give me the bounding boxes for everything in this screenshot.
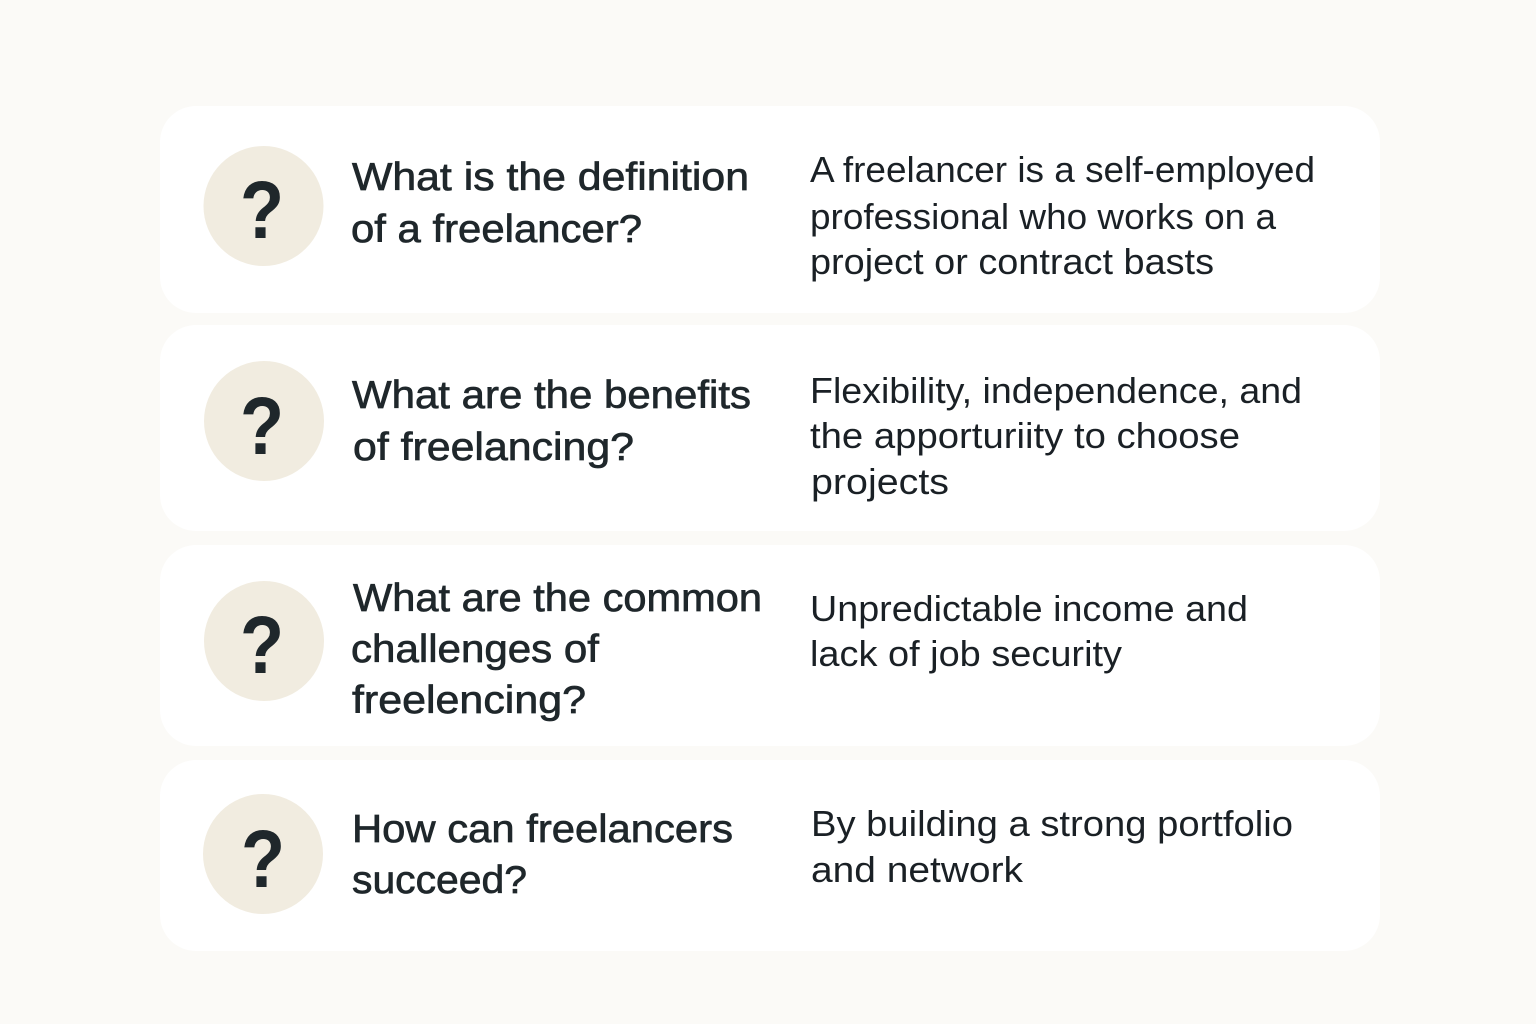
answer text: project or contract basts — [810, 241, 1214, 282]
question heading: What are the common — [353, 577, 762, 620]
question heading: succeed? — [352, 859, 527, 902]
panel: common challenges of freelancing — [160, 545, 1380, 746]
answer text: professional who works on a — [810, 196, 1277, 237]
answer text — [810, 149, 1315, 282]
answer text — [810, 370, 1302, 502]
icon: question mark badge — [203, 794, 323, 914]
answer text: and network — [811, 849, 1024, 890]
question heading — [351, 577, 762, 722]
answer text: A freelancer is a self-employed — [810, 149, 1315, 190]
panel: definition of a freelancer — [160, 106, 1380, 313]
question heading — [351, 156, 749, 251]
answer text: projects — [811, 461, 949, 502]
icon: question mark badge: ? — [241, 814, 285, 905]
answer text — [810, 588, 1248, 674]
answer text: lack of job security — [810, 633, 1122, 674]
answer text: By building a strong portfolio — [811, 803, 1293, 844]
answer text: the apporturiity to choose — [810, 415, 1240, 456]
question heading: of a freelancer? — [351, 208, 642, 251]
icon: question mark badge — [204, 361, 324, 481]
question heading: of freelancing? — [353, 426, 634, 469]
question heading: What are the benefits — [352, 374, 751, 417]
panel: benefits of freelancing — [160, 325, 1380, 531]
question heading — [352, 808, 733, 902]
icon: question mark badge: ? — [240, 165, 284, 256]
question heading: How can freelancers — [352, 808, 733, 851]
icon: question mark badge — [204, 581, 324, 701]
answer text: Flexibility, independence, and — [810, 370, 1302, 411]
icon: question mark badge: ? — [240, 600, 284, 691]
icon: question mark badge: ? — [240, 381, 284, 472]
question heading — [352, 374, 751, 469]
question heading: What is the definition — [352, 156, 749, 199]
answer text — [811, 803, 1293, 890]
question heading: challenges of — [351, 628, 599, 671]
icon: question mark badge — [204, 146, 324, 266]
question heading: freelencing? — [352, 679, 586, 722]
panel: how freelancers succeed — [160, 760, 1380, 951]
answer text: Unpredictable income and — [810, 588, 1248, 629]
